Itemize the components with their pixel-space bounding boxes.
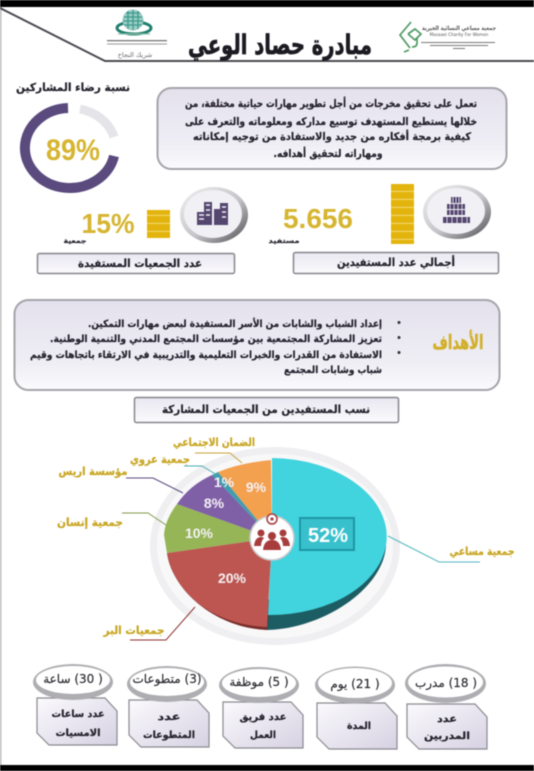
panel: intro text: ومهاراته لتحقيق أهدافه. [274,146,382,160]
stat: team members: عدد فريق [240,712,286,723]
leader: orange [195,453,242,463]
unit: beneficiary: مستفيد [268,237,300,245]
stat: evening hours: الامسيات [56,728,100,739]
label: Masaaei association: جمعية مساعي [450,545,514,558]
goal 1: إعداد الشباب والشابات من الأسر المستفيدة لبعض مهارات التمكين. [88,317,382,330]
stat: duration [315,666,397,749]
logo: Masaaei charity: Masaaei Charity For Women [430,32,489,37]
label: Insan association: جمعية إنسان [57,516,123,529]
donut chart: 89% [25,108,114,188]
value: 9%: 9% [246,479,267,495]
value: 10%: 10% [185,525,214,541]
goal 3 continued: شباب وشابات المجتمع [284,365,382,376]
slice side: dark red [167,553,270,630]
value: 8%: 8% [204,495,225,511]
pie base rings [150,447,400,645]
stat: trainers: عدد [437,714,457,725]
gold bar: associations [147,210,170,238]
bullets [398,322,401,352]
stat: trainers: المدربين [424,731,470,742]
stat: evening hours [33,664,117,745]
heading: satisfaction rate: نسبة رضاء المشاركين [16,81,130,94]
heading bar: share of beneficiaries [134,398,398,422]
pie chart [57,436,514,645]
stat: female volunteers [127,666,209,747]
title: مبادرة حصاد الوعي [188,30,372,61]
stat: trainers: ( 18) مدرب [415,676,477,691]
leader: purple [126,478,183,493]
gold bar: beneficiaries [391,184,414,244]
panel: intro text: تعمل على تحقيق مخرجات من أجل تطوير مهارات حياتية مختلفة، من [185,96,477,110]
logo: partner globe: شريك النجاح [118,51,152,59]
panel: intro text: كيفية برمجة أفكاره من جديد والاستفادة من توجيه إمكاناته [193,129,472,143]
value box: 52% [300,518,354,550]
panel: goals [14,300,500,390]
label: Al-Birr associations: جمعيات البر [103,624,164,637]
stat: trainers [405,664,487,749]
slice: 9% [218,460,272,538]
leader: cyan [388,536,480,562]
label: social solidarity: الضمان الاجتماعي [173,436,255,449]
leader: teal [184,466,217,475]
leader: red [130,607,195,640]
slice: 20% [167,538,272,627]
slice: 52% [268,458,387,615]
label: number of associations: عدد الجمعيات المستفيدة [78,257,202,270]
value: 5.656: 5.656 [283,203,353,234]
goals heading: الأهداف [432,329,484,354]
panel: intro text [158,88,506,169]
value box: 52%: 52% [308,525,348,547]
logo: partner globe [107,10,167,59]
logo: Masaaei charity: جمعية مساعي النسائية الخيرية [422,25,496,32]
stat: female volunteers: (3) متطوعات [132,672,202,687]
leader: green [122,513,166,525]
stat: team members [219,667,303,748]
value: 15%: 15% [82,208,135,239]
top black bar [0,0,534,7]
icon: beneficiaries badge [423,185,491,239]
stat: duration: المدة [347,721,371,732]
stat: team members: ( 5) موظفة [229,675,289,690]
slice side: dark teal [265,545,386,630]
panel: intro text: خلالها يستطيع المستهدف توسيع مداركه ومعلوماته والتعرف على [185,116,477,128]
icon: hub with people [250,514,294,560]
slice: 10% [164,504,272,553]
unit: association: جمعية [64,237,87,245]
goal 2: تعزيز المشاركة المجتمعية بين مؤسسات المجتمع المدني والتنمية الوطنية. [50,334,382,345]
stat: evening hours: عدد ساعات [52,709,104,720]
donut chart: 89%: 89% [46,134,100,167]
stat: female volunteers: المتطوعات [143,730,195,741]
stat: evening hours: ( 30) ساعة [43,672,103,686]
slice: 1% [212,472,272,538]
value: 20%: 20% [218,570,247,586]
icon: associations badge [180,187,248,243]
stat: female volunteers: عدد [158,712,180,723]
label: Orwa association: جمعية عروي [130,453,190,466]
header rule [0,8,534,61]
heading bar: share of beneficiaries: نسب المستفيدين من الجمعيات المشاركة [162,403,370,416]
label: number of associations [38,254,234,274]
stat: team members: العمل [250,730,276,741]
label: Arees foundation: مؤسسة اريس [58,465,128,478]
bottom black bar [0,765,534,771]
goal 3: الاستفادة من القدرات والخبرات التعليمية والتدريبية في الارتقاء باتجاهات وقيم [30,350,382,361]
logo: Masaaei charity [400,22,496,52]
slice: 8% [177,475,272,538]
value: 1%: 1% [214,474,235,490]
label: total beneficiaries: أجمالي عدد المستفيدين [337,255,455,269]
stat: duration: ( 21) يوم [330,677,380,692]
label: total beneficiaries [294,252,498,274]
